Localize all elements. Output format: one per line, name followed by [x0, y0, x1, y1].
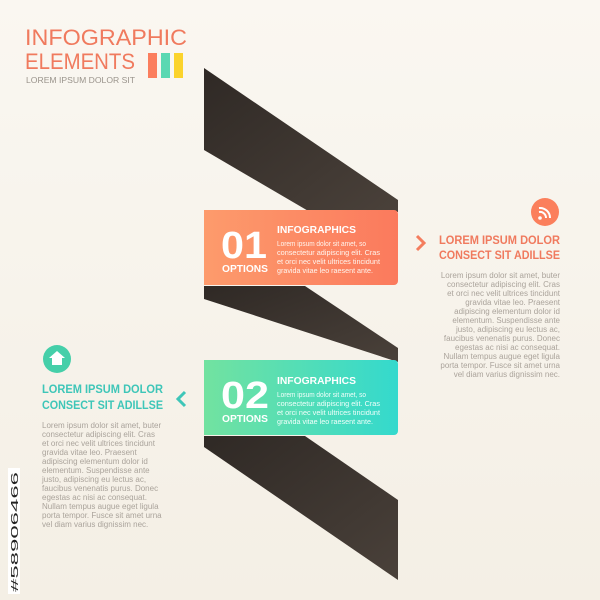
panel: option 01: INFOGRAPHICS	[277, 225, 356, 236]
text block: left: elementum. Suspendisse ante	[42, 466, 150, 475]
heading: right	[439, 235, 561, 262]
heading: left: LOREM IPSUM DOLOR	[42, 384, 164, 396]
ribbon: band 3	[204, 436, 398, 580]
arrow: left	[178, 392, 185, 406]
ribbon: band 2	[204, 286, 398, 362]
text block: left: et orci nec velit ultrices tincidunt	[42, 439, 156, 448]
title: ELEMENTS	[25, 49, 135, 74]
panel: option 01: 01	[221, 225, 267, 267]
title	[25, 25, 187, 74]
icon: home	[43, 345, 71, 373]
text block: left: Lorem ipsum dolor sit amet, buter	[42, 421, 161, 430]
panel: option 01: gravida vitae leo raesent ante.	[277, 268, 373, 275]
text block: right: vel diam varius dignissim nec.	[454, 370, 560, 379]
arrow: right	[417, 236, 424, 250]
panel: option 01: et orci nec velit ultrices tincidunt	[277, 259, 380, 266]
text block: left	[41, 421, 162, 529]
panel: option 02	[204, 360, 398, 435]
panel: option 02: OPTIONS	[222, 414, 268, 425]
text block: right: egestas ac nisi ac consequat.	[455, 343, 560, 352]
text block: right: elementum. Suspendisse ante	[452, 316, 561, 325]
heading: right: LOREM IPSUM DOLOR	[439, 235, 561, 247]
text block: left: gravida vitae leo. Praesent	[42, 448, 138, 457]
panel: option 01: Lorem ipsum dolor sit amet, so	[277, 241, 366, 248]
text block: right: justo, adipiscing eu lectus ac,	[455, 325, 560, 334]
icon: color bars	[148, 53, 183, 78]
text block: left: faucibus venenatis purus. Donec	[42, 484, 158, 493]
stock id	[8, 468, 21, 594]
heading: left	[42, 384, 164, 412]
title: INFOGRAPHIC	[25, 25, 187, 50]
panel: option 02: et orci nec velit ultrices tincidunt	[277, 410, 380, 417]
text block: right: adipiscing elementum dolor id	[454, 307, 560, 316]
text block: right	[440, 271, 561, 379]
stock id: #58906466	[10, 471, 21, 592]
text block: right: Nullam tempus augue eget ligula	[443, 352, 561, 361]
text block: right: et orci nec velit ultrices tincidunt	[447, 289, 561, 298]
text block: left: Nullam tempus augue eget ligula	[42, 502, 159, 511]
text block: right: Lorem ipsum dolor sit amet, buter	[441, 271, 560, 280]
subtitle: LOREM IPSUM DOLOR SIT	[26, 75, 135, 85]
panel: option 02: Lorem ipsum dolor sit amet, so	[277, 392, 366, 399]
ribbon: band 1	[204, 68, 398, 212]
text block: right: porta tempor. Fusce sit amet urna	[440, 361, 561, 370]
heading: right: CONSECT SIT ADILLSE	[439, 250, 560, 262]
panel: option 02: INFOGRAPHICS	[277, 376, 356, 387]
text block: left: egestas ac nisi ac consequat.	[42, 493, 147, 502]
panel: option 01: consectetur adipiscing elit. Cras	[277, 250, 381, 257]
text block: left: porta tempor. Fusce sit amet urna	[42, 511, 162, 520]
panel: option 02: gravida vitae leo raesent ante.	[277, 419, 373, 426]
text block: left: vel diam varius dignissim nec.	[42, 520, 148, 529]
text block: right: gravida vitae leo. Praesent	[465, 298, 561, 307]
heading: left: CONSECT SIT ADILLSE	[42, 400, 163, 412]
panel: option 01	[204, 210, 398, 285]
panel: option 01: OPTIONS	[222, 264, 268, 275]
icon: rss	[531, 198, 559, 226]
text block: left: justo, adipiscing eu lectus ac,	[41, 475, 146, 484]
text block: right: consectetur adipiscing elit. Cras	[447, 280, 560, 289]
panel: option 02: consectetur adipiscing elit. Cras	[277, 401, 381, 408]
panel: option 02: 02	[221, 375, 269, 417]
text block: right: faucibus venenatis purus. Donec	[444, 334, 560, 343]
text block: left: consectetur adipiscing elit. Cras	[42, 430, 155, 439]
text block: left: adipiscing elementum dolor id	[42, 457, 148, 466]
